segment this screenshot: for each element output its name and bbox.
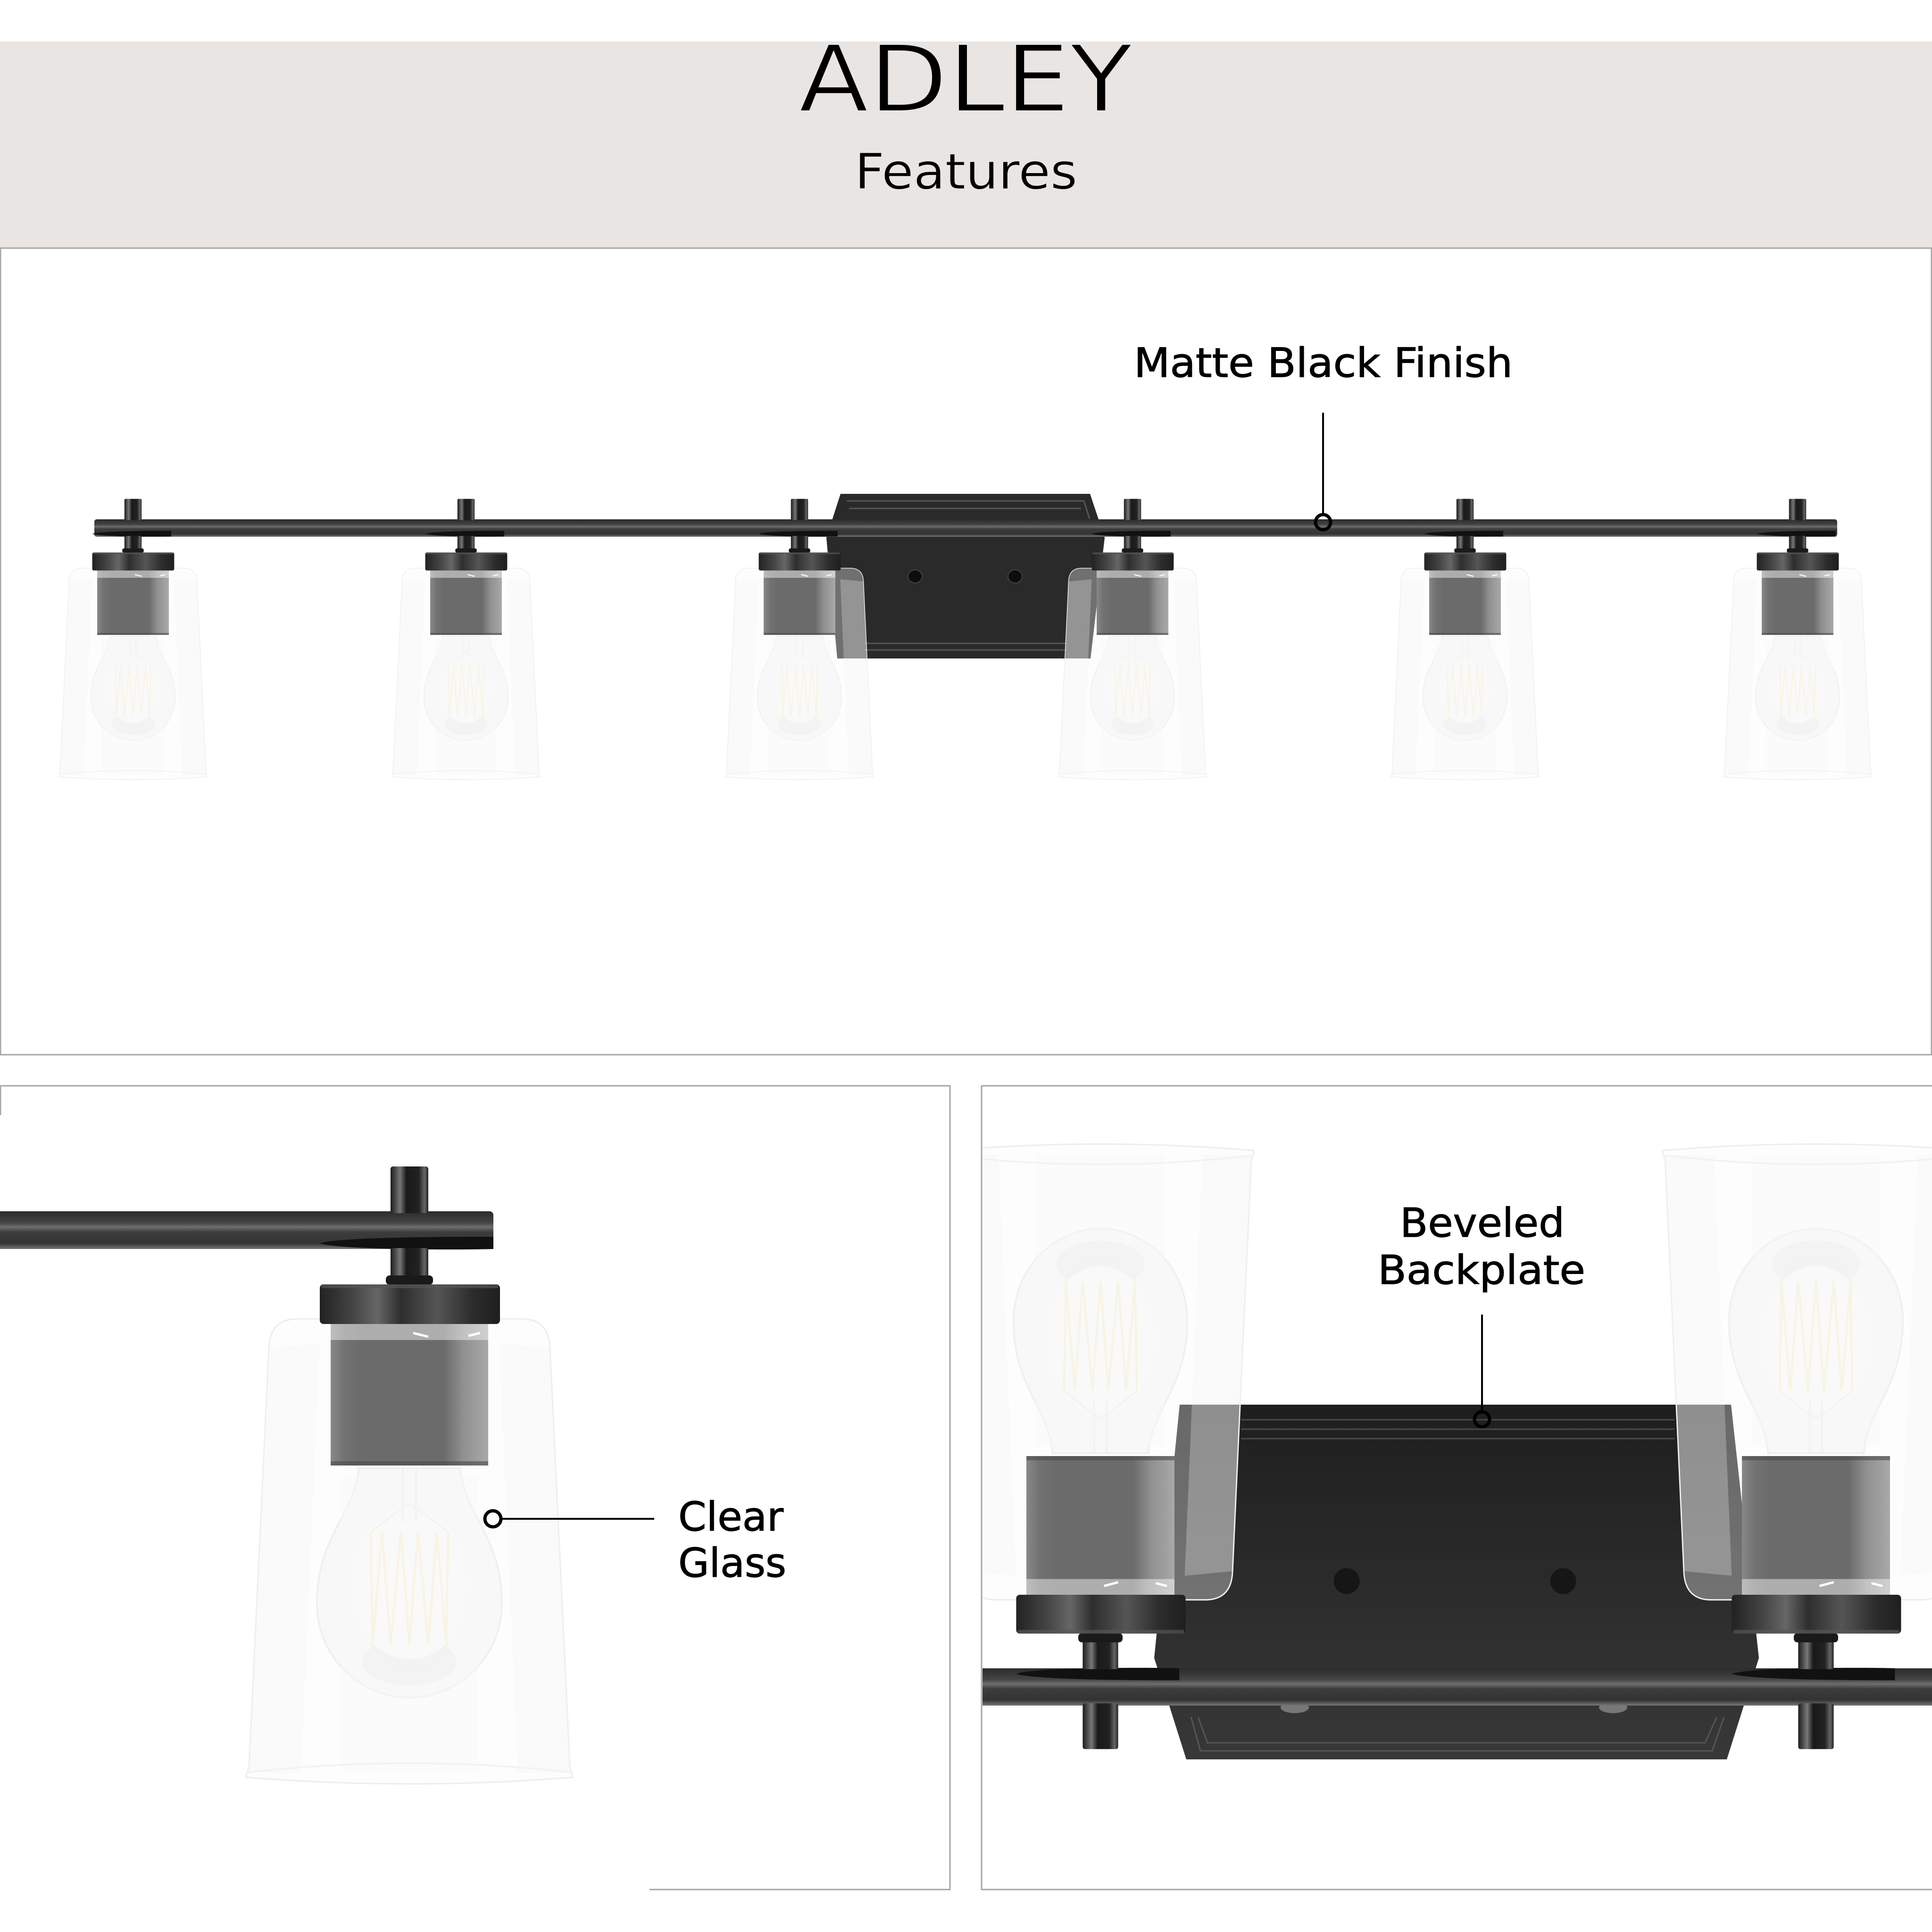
- callout: beveled backplate: Backplate: [1378, 1247, 1585, 1294]
- lamp 1: [59, 499, 207, 780]
- crossbar detail: [0, 1211, 493, 1249]
- crossbar: [94, 519, 1837, 537]
- title: ADLEY: [799, 26, 1133, 133]
- callout: matte black finish: Matte Black Finish: [1134, 340, 1513, 387]
- lamp 3: [725, 499, 874, 780]
- callout: clear glass: Clear: [678, 1494, 783, 1541]
- panel: beveled backplate detail: [947, 1086, 1932, 1890]
- header band: [0, 26, 1932, 248]
- lamp detail: [246, 1166, 573, 1784]
- callout: clear glass: Glass: [678, 1540, 786, 1587]
- left lamp, inverted: [983, 1143, 1255, 1749]
- callout: beveled backplate: [1378, 1200, 1585, 1427]
- callout: beveled backplate: Beveled: [1400, 1200, 1565, 1247]
- right lamp, inverted: [1663, 1144, 1932, 1749]
- backplate: [826, 494, 1105, 658]
- callout: matte black finish: [1134, 340, 1513, 530]
- lamp 2: [392, 499, 540, 780]
- lamp 4: [1058, 499, 1207, 780]
- panel: full fixture, matte black finish: [0, 248, 1932, 1055]
- lamp 6: [1724, 499, 1872, 780]
- backplate detail: [1154, 1405, 1759, 1759]
- subtitle: Features: [855, 143, 1077, 200]
- lamp 5: [1391, 499, 1539, 780]
- panel: clear glass detail: [0, 1086, 950, 1890]
- crossbar detail: [983, 1668, 1932, 1706]
- callout: clear glass: [485, 1494, 786, 1587]
